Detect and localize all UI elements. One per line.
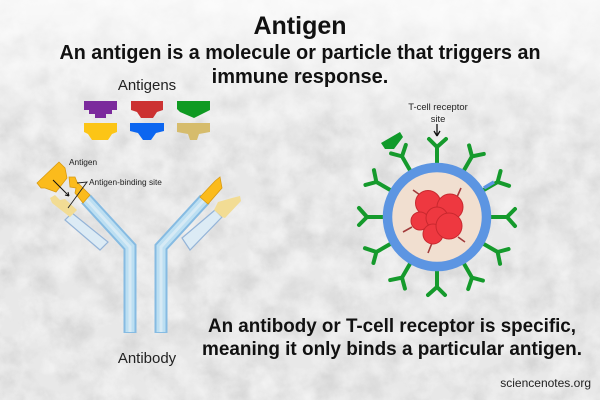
antigen: red (131, 101, 163, 118)
explanatory text: An antibody or T-cell receptor is specific, (208, 316, 576, 337)
label: antibody: Antibody (118, 350, 177, 367)
explanatory text: meaning it only binds a particular antigen. (202, 339, 582, 360)
label: site: site (431, 113, 445, 124)
bound antigen (37, 162, 67, 192)
right yellow tip (200, 177, 222, 204)
arrow to binding site (53, 180, 69, 196)
antigen: yellow (84, 123, 117, 140)
explanatory text (202, 316, 582, 360)
antigen: blue (130, 123, 164, 140)
subtitle: immune response. (212, 66, 388, 88)
antigen: tan (177, 123, 210, 140)
receptors (359, 139, 515, 295)
title: Antigen (253, 12, 347, 40)
right light chain (182, 210, 222, 250)
heading: antigens: Antigens (118, 77, 176, 94)
cell membrane (388, 168, 486, 266)
blue receptor stem (484, 182, 494, 188)
label: binding site: Antigen-binding site (89, 177, 162, 187)
bound antigen (381, 132, 403, 149)
left heavy chain (86, 199, 130, 333)
label: antigen: Antigen (69, 157, 98, 167)
t-cell (359, 101, 515, 295)
binding site pointers (68, 182, 87, 208)
antibody (37, 157, 241, 333)
left yellow tip (69, 177, 90, 203)
t-cell receptor arrow (434, 124, 440, 136)
subtitle: An antigen is a molecule or particle that triggers an (60, 42, 540, 64)
left tan tip (50, 195, 77, 217)
left light chain (65, 213, 108, 250)
antigen: green (177, 101, 210, 118)
source: sciencenotes.org (500, 376, 591, 390)
subtitle (60, 42, 540, 88)
antigen: purple (84, 101, 117, 118)
right tan tip (214, 196, 241, 218)
nucleus (403, 188, 465, 253)
right heavy chain (161, 199, 205, 333)
label: t-cell receptor site: T-cell receptor (408, 101, 468, 112)
antigen shapes (84, 101, 210, 140)
